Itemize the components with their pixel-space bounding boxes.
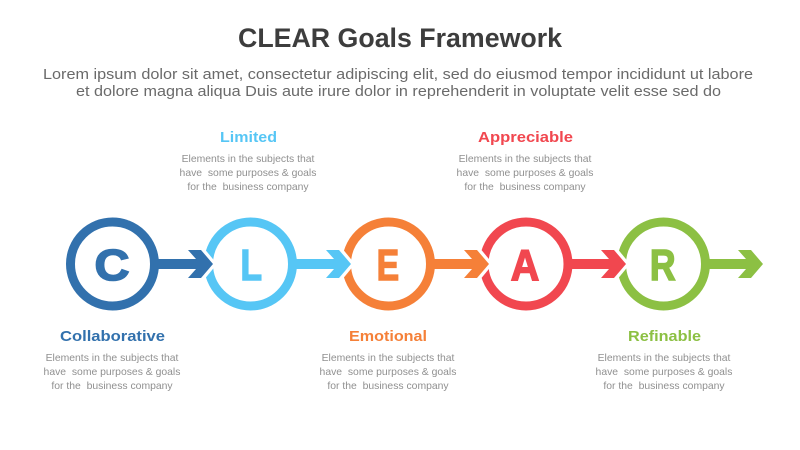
label: Limited: for the business company [187, 182, 309, 193]
arrow: E to A [431, 250, 489, 278]
label: Collaborative [44, 328, 180, 392]
step R circle [616, 222, 706, 306]
label: Emotional: Elements in the subjects that [322, 353, 455, 364]
label: Collaborative: for the business company [51, 381, 173, 392]
label: Limited: Limited [220, 129, 277, 146]
arrow: A to R [568, 250, 626, 278]
label: Collaborative: Elements in the subjects that [46, 353, 179, 364]
step L circle [203, 222, 292, 306]
label: Emotional [320, 328, 456, 392]
label: Appreciable: Appreciable [478, 129, 573, 146]
subtitle: Lorem ipsum dolor sit amet, consectetur adipiscing elit, sed do eiusmod tempor incididunt ut labore [43, 66, 753, 83]
arrow: R outgoing [706, 250, 763, 278]
label: Refinable [596, 328, 732, 392]
subtitle [43, 66, 753, 100]
label: Emotional: for the business company [327, 381, 449, 392]
step E circle: E [377, 241, 399, 290]
label: Refinable: have some purposes & goals [596, 367, 732, 378]
step E circle [341, 222, 430, 306]
arrow: L to E [293, 250, 351, 278]
subtitle: et dolore magna aliqua Duis aute irure dolor in reprehenderit in voluptate velit esse sed do [76, 83, 721, 100]
label: Collaborative: have some purposes & goals [44, 367, 180, 378]
step A circle: A [511, 241, 539, 290]
label: Refinable: Elements in the subjects that [598, 353, 731, 364]
step A circle [479, 222, 568, 306]
label: Appreciable [457, 129, 593, 193]
label: Limited: Elements in the subjects that [182, 154, 315, 165]
label: Emotional: have some purposes & goals [320, 367, 456, 378]
label: Limited [180, 129, 316, 193]
step R circle: R [650, 241, 676, 290]
label: Appreciable: Elements in the subjects that [459, 154, 592, 165]
label: Limited: have some purposes & goals [180, 168, 316, 179]
step C circle and arrow: C [94, 241, 130, 290]
label: Appreciable: for the business company [464, 182, 586, 193]
label: Collaborative: Collaborative [60, 328, 165, 345]
label: Refinable: Refinable [628, 328, 701, 345]
step C circle and arrow [70, 222, 154, 306]
label: Emotional: Emotional [349, 328, 427, 345]
label: Appreciable: have some purposes & goals [457, 168, 593, 179]
step L circle: L [240, 241, 262, 290]
arrow: C to L [155, 250, 213, 278]
title: CLEAR Goals Framework [238, 23, 563, 53]
label: Refinable: for the business company [603, 381, 725, 392]
